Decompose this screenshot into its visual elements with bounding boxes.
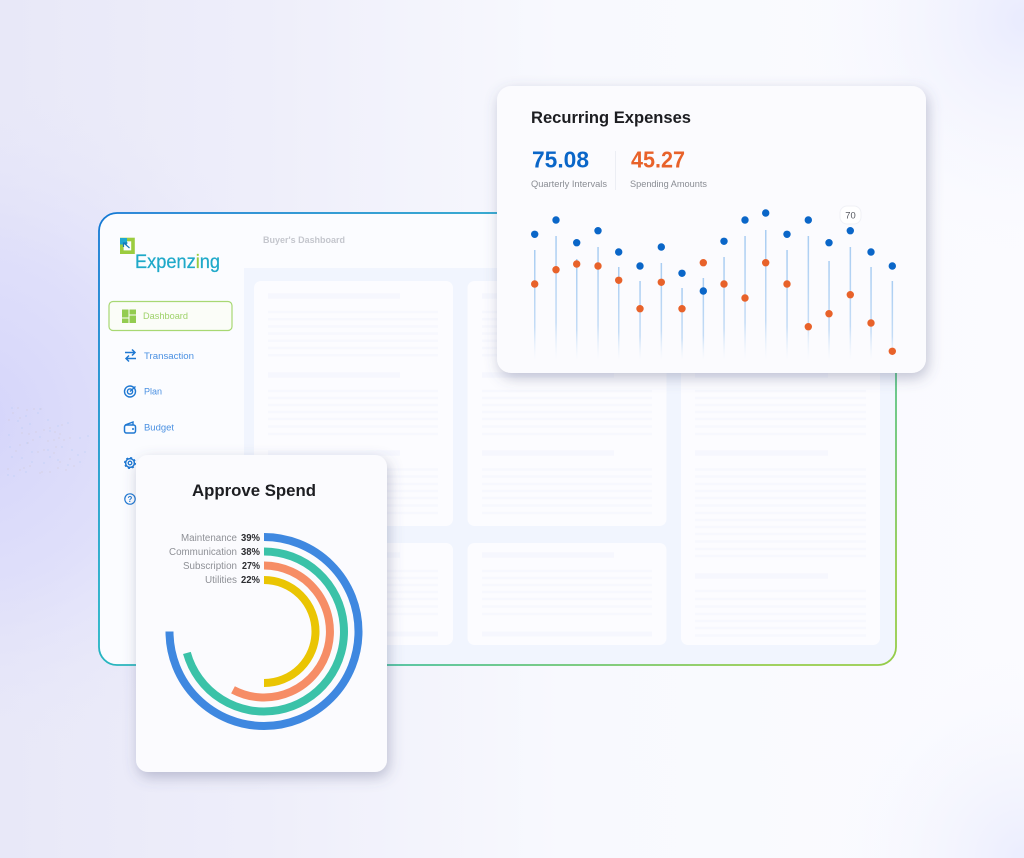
sidebar item: Dashboard: Dashboard bbox=[143, 310, 188, 321]
dotted decoration bbox=[8, 408, 88, 476]
legend: Subscription bbox=[183, 561, 237, 572]
tooltip: 70: 70 bbox=[845, 210, 856, 220]
icon: help: ? bbox=[128, 495, 133, 504]
stat: spending amounts: 45.27 bbox=[631, 146, 685, 172]
radial bar chart bbox=[170, 537, 358, 726]
sidebar item: Transaction: Transaction bbox=[144, 351, 194, 362]
tooltip: 70 bbox=[840, 206, 861, 224]
legend: Utilities bbox=[205, 575, 237, 586]
stat: quarterly intervals bbox=[531, 146, 607, 189]
sidebar item: Budget: Budget bbox=[144, 422, 174, 434]
logo bbox=[120, 238, 220, 273]
content cards bbox=[254, 281, 880, 645]
legend: Communication bbox=[169, 547, 237, 558]
sidebar item: Dashboard bbox=[109, 302, 232, 330]
heading: Recurring Expenses: Recurring Expenses bbox=[531, 108, 691, 127]
sidebar item: Budget bbox=[124, 422, 174, 434]
logo: Expenzing bbox=[135, 251, 220, 273]
stat: quarterly intervals: 75.08 bbox=[532, 146, 589, 172]
sidebar item: Plan: Plan bbox=[144, 386, 162, 398]
sidebar item: Transaction bbox=[125, 350, 194, 362]
stat: spending amounts: Spending Amounts bbox=[630, 178, 707, 189]
legend: 38% bbox=[241, 547, 260, 558]
legend: 22% bbox=[241, 575, 260, 586]
panel: Recurring Expenses bbox=[497, 86, 926, 373]
stat: spending amounts bbox=[630, 146, 707, 189]
panel: dashboard window bbox=[99, 213, 896, 665]
icon: settings bbox=[125, 458, 135, 468]
page heading: Buyer's Dashboard bbox=[263, 235, 345, 245]
heading: Approve Spend: Approve Spend bbox=[192, 481, 316, 500]
icon: help bbox=[125, 494, 135, 504]
legend: Maintenance bbox=[181, 533, 238, 544]
lollipop chart bbox=[531, 206, 896, 360]
panel: Approve Spend bbox=[136, 455, 387, 772]
legend: 27% bbox=[242, 561, 260, 572]
legend bbox=[169, 533, 260, 586]
stat: quarterly intervals: Quarterly Intervals bbox=[531, 178, 607, 189]
legend: 39% bbox=[241, 533, 260, 544]
sidebar item: Plan bbox=[124, 386, 162, 398]
